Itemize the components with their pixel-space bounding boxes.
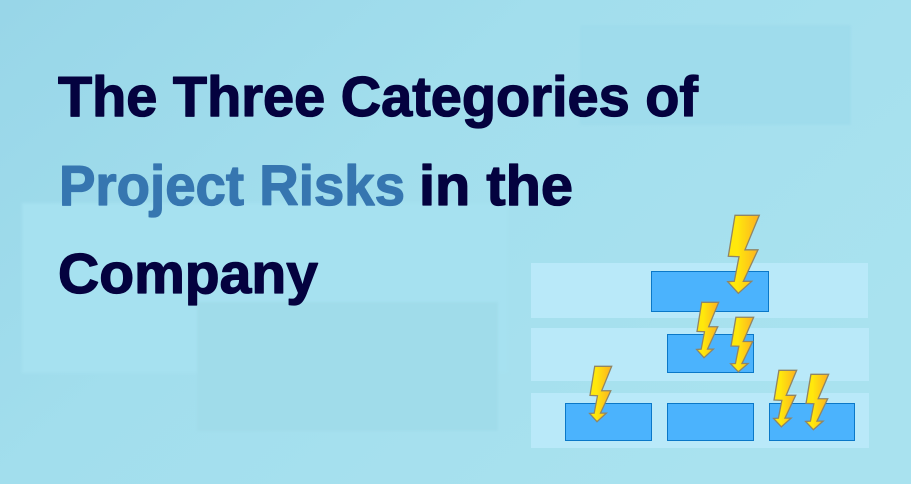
title line 2 highlight: Project Risks: [59, 154, 405, 218]
icon: lightning bolt middle left: [697, 302, 719, 358]
icon: lightning bolt middle right: [731, 317, 754, 372]
row band: bottom: [531, 393, 869, 448]
title line 1: The Three Categories of: [58, 65, 699, 129]
title line 3: Company: [58, 242, 318, 306]
box: bottom centre: [668, 404, 754, 440]
background panel: top right: [580, 25, 851, 125]
background panel: lower centre: [197, 302, 498, 431]
risk hierarchy diagram: [531, 215, 869, 448]
icon: lightning bolt large: [728, 215, 759, 293]
icon: lightning bolt bottom right 2: [806, 374, 829, 430]
row band: top: [531, 263, 868, 318]
icon: lightning bolt bottom right 1: [774, 370, 797, 427]
title: [58, 65, 699, 306]
box: bottom right: [770, 404, 854, 440]
title line 2 rest: in the: [419, 154, 573, 218]
background panel: left light: [22, 203, 508, 373]
box: bottom left: [566, 404, 652, 440]
box: top: [652, 272, 768, 312]
box: middle: [668, 334, 754, 372]
icon: lightning bolt bottom left: [590, 366, 612, 422]
row band: middle: [531, 328, 869, 381]
